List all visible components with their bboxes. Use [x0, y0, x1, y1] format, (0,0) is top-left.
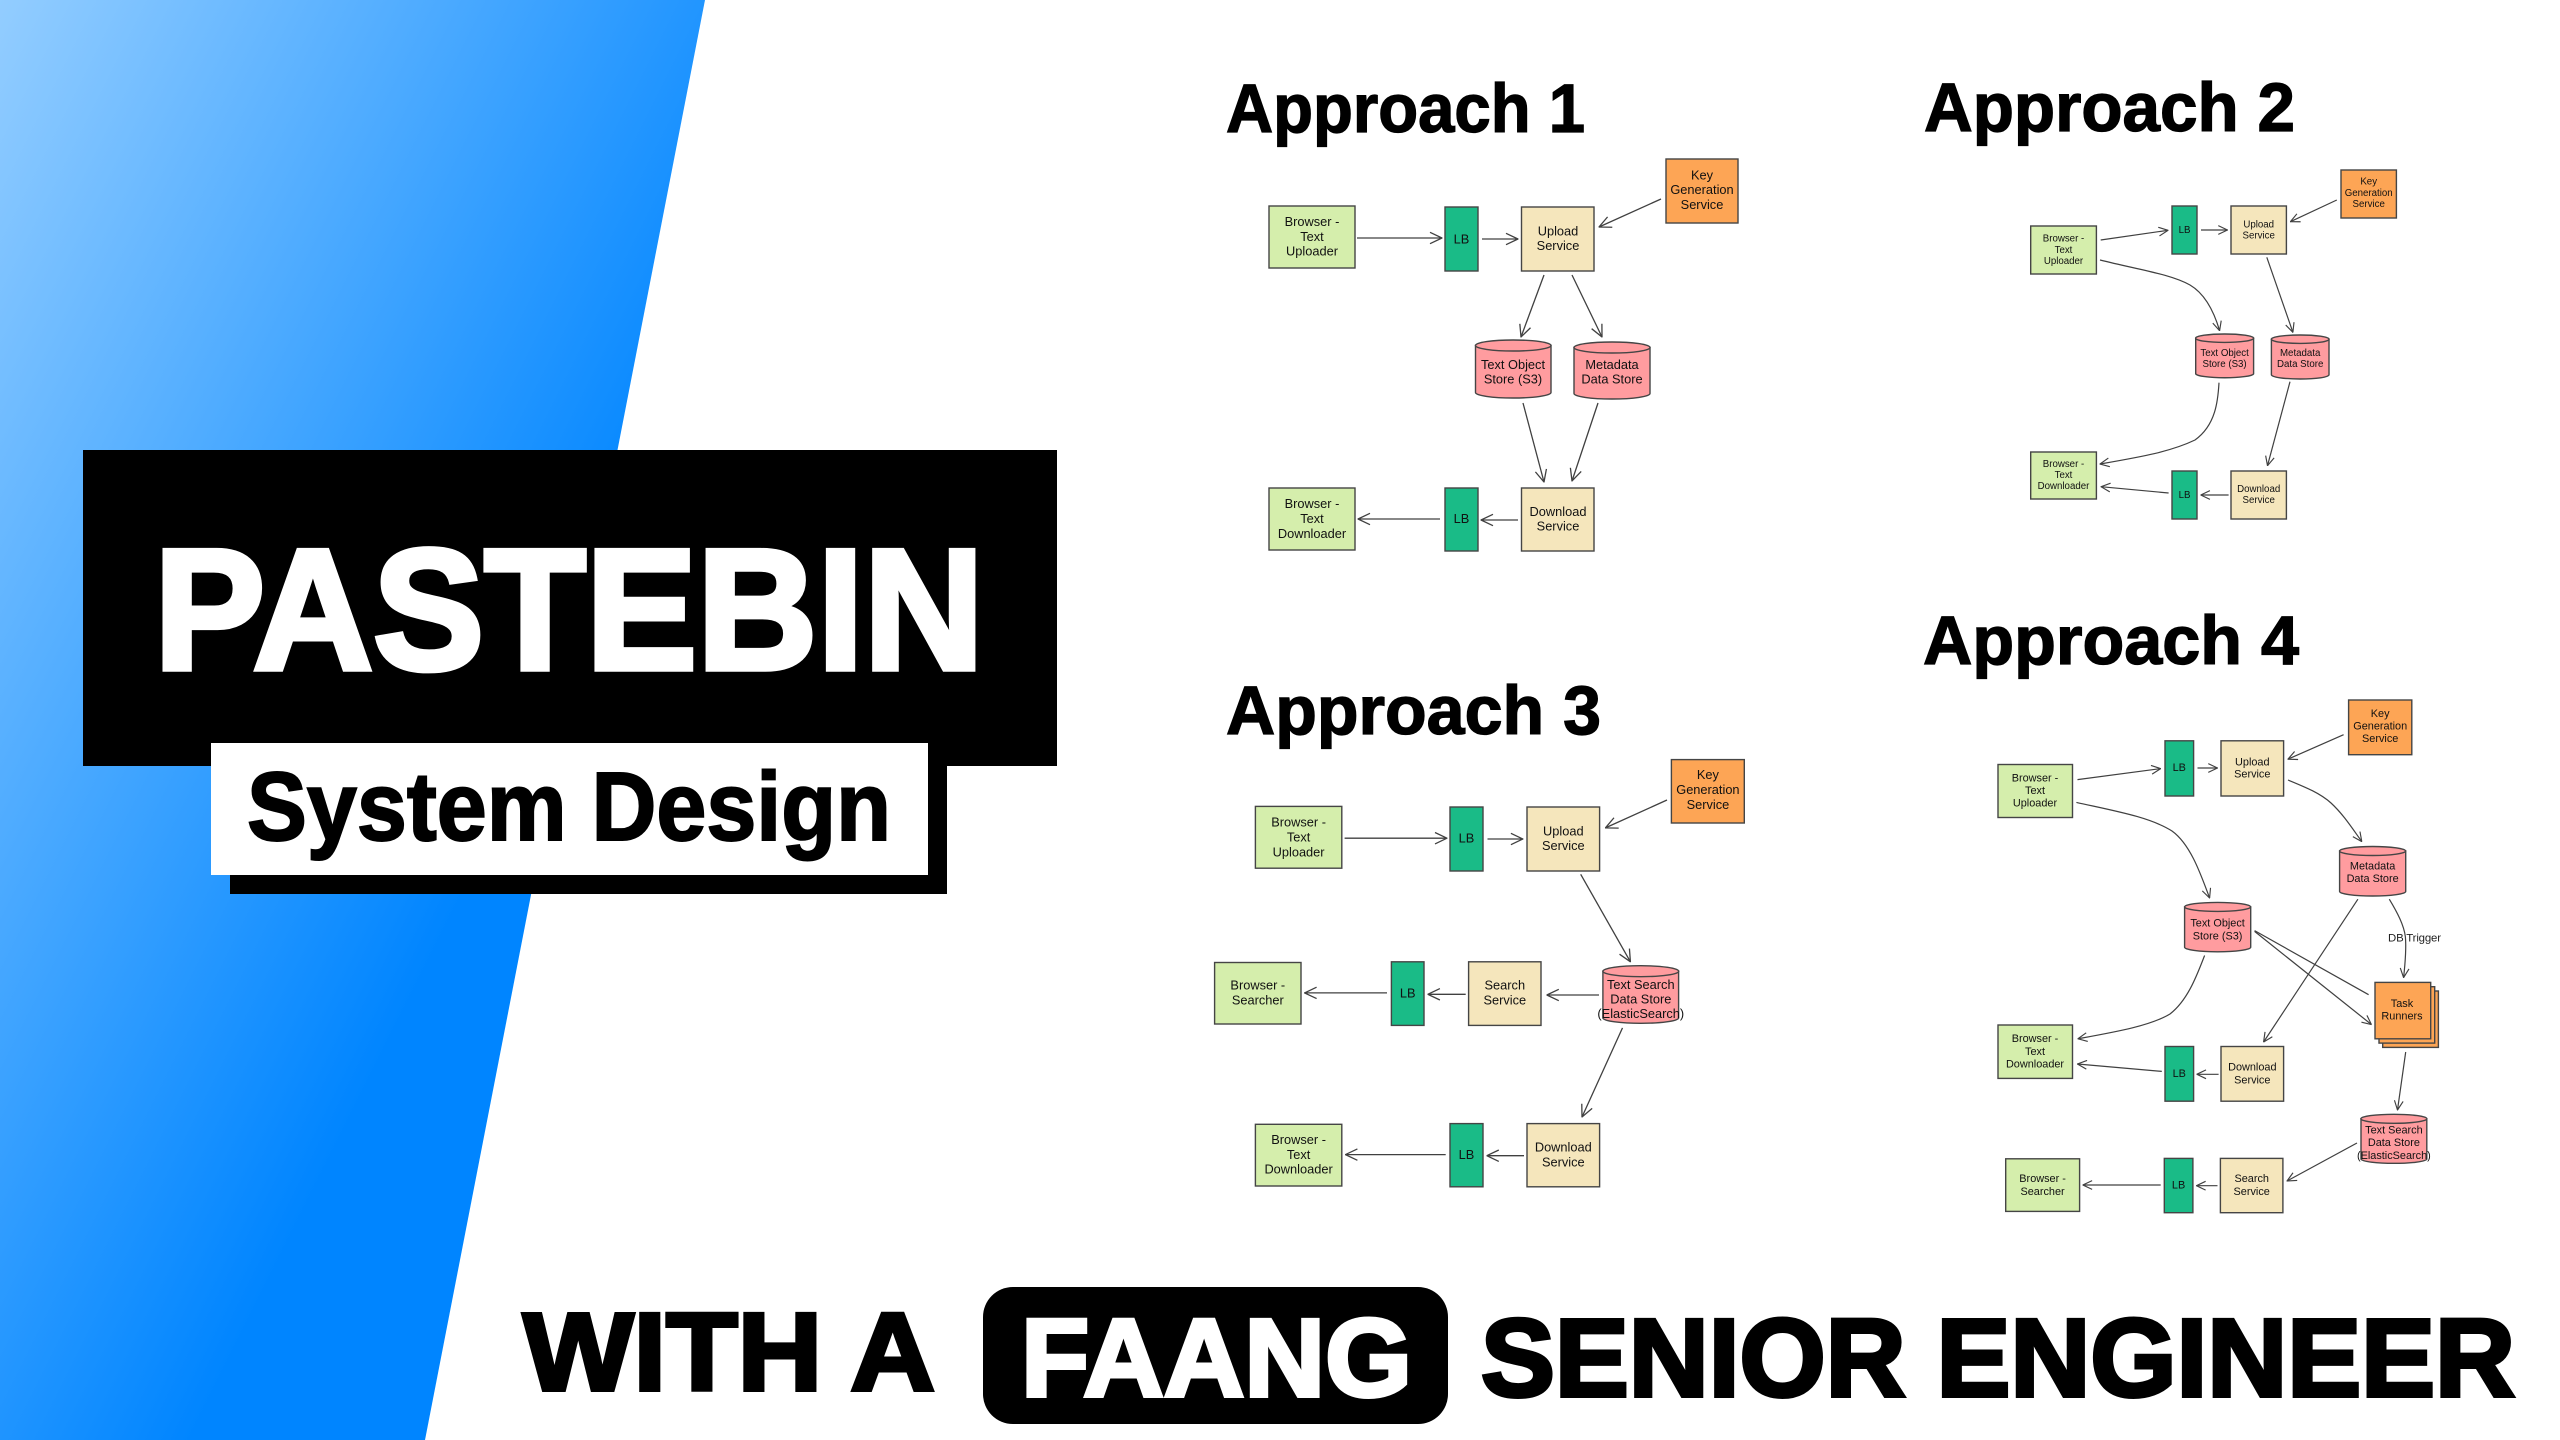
node: Browser - Text Uploader	[1269, 206, 1355, 268]
node: LB upper	[2172, 206, 2197, 254]
node: Browser - Text Uploader: Uploader	[2044, 256, 2084, 267]
node: Text Search Data Store (ElasticSearch): (ElasticSearch)	[1597, 1006, 1684, 1021]
node: Browser - Text Uploader: Text	[1300, 229, 1324, 244]
node: Metadata Data Store: Data Store	[1581, 372, 1643, 386]
node: Browser - Text Downloader: Downloader	[2038, 481, 2090, 492]
node: LB lower	[2172, 471, 2197, 519]
tagline: WITH A FAANG SENIOR ENGINEER	[523, 1287, 2515, 1424]
node: Text Object Store (S3): Store (S3)	[2203, 359, 2247, 370]
node: Metadata Data Store	[2340, 846, 2406, 896]
node: Text Object Store (S3): Store (S3)	[2193, 930, 2242, 942]
node: Metadata Data Store: Data Store	[2347, 873, 2399, 885]
node: LB middle	[2165, 1046, 2194, 1101]
node: Browser - Text Downloader: Browser -	[2012, 1033, 2059, 1045]
panel: Approach 1	[1226, 70, 1738, 551]
node: Browser - Text Downloader: Text	[2025, 1046, 2045, 1058]
node: Browser - Text Uploader	[1998, 764, 2072, 818]
node: Search Service	[2220, 1158, 2283, 1213]
heading: Approach 3: Approach 3	[1226, 672, 1601, 749]
heading: Approach 4: Approach 4	[1923, 602, 2299, 679]
node: Download Service	[1527, 1124, 1600, 1187]
arrows: approach 3	[1305, 800, 1667, 1156]
node: Browser - Text Downloader	[2031, 452, 2096, 499]
node: Browser - Text Downloader: Browser -	[1271, 1132, 1326, 1147]
node: Browser - Text Downloader: Text	[2055, 470, 2073, 481]
node: Upload Service	[2231, 206, 2286, 254]
node: Upload Service: Service	[2234, 769, 2270, 781]
title panel: black box	[83, 450, 1057, 766]
node: Metadata Data Store	[2271, 335, 2329, 379]
node: Browser - Text Uploader: Browser -	[1271, 814, 1326, 829]
panel: Approach 3	[1215, 672, 1744, 1187]
node: Key Generation Service: Key	[2371, 708, 2390, 720]
node: Upload Service: Service	[2243, 230, 2275, 242]
arrows: approach 4	[2076, 735, 2406, 1186]
node: Key Generation Service: Generation	[1676, 782, 1740, 797]
title block: PASTEBIN System Design	[83, 450, 1057, 894]
node: Text Object Store (S3)	[1476, 340, 1551, 398]
node: LB middle: LB	[2173, 1068, 2186, 1080]
node: Browser - Text Downloader	[1255, 1124, 1342, 1186]
label: DB Trigger: DB Trigger	[2388, 932, 2441, 944]
node: Download Service: Download	[2237, 484, 2280, 495]
node: Metadata Data Store: Metadata	[2350, 860, 2396, 872]
node: Text Object Store (S3): Text Object	[2200, 348, 2249, 359]
node: Search Service	[1469, 962, 1541, 1025]
node: Search Service: Service	[1483, 992, 1526, 1008]
node: Browser - Searcher: Searcher	[1232, 992, 1284, 1008]
node: LB lower: LB	[2172, 1179, 2185, 1191]
node: Browser - Text Downloader: Downloader	[1278, 526, 1347, 541]
node: Text Search Data Store (ElasticSearch): Data Store	[2368, 1137, 2420, 1149]
node: Browser - Searcher	[2006, 1159, 2080, 1211]
node: LB upper	[2165, 741, 2194, 796]
panel: Approach 4	[1923, 602, 2441, 1213]
node: LB lower: LB	[1459, 1147, 1474, 1162]
node: Key Generation Service: Generation	[2353, 720, 2407, 732]
node: Search Service: Search	[1485, 978, 1525, 992]
node: Task Runners stack: Runners	[2381, 1011, 2423, 1023]
node: Upload Service: Upload	[2243, 220, 2274, 230]
node: LB upper: LB	[2179, 225, 2190, 236]
node: LB upper	[1445, 207, 1478, 271]
node: Download Service	[1522, 488, 1594, 551]
node: LB lower: LB	[2179, 490, 2190, 501]
node: Key Generation Service	[1671, 760, 1744, 823]
node: Browser - Text Downloader: Downloader	[2006, 1058, 2064, 1070]
FAANG pill	[983, 1287, 1448, 1424]
node: Browser - Text Uploader: Text	[2055, 245, 2073, 256]
node: Browser - Text Uploader: Uploader	[1286, 244, 1339, 258]
node: LB lower: LB	[1454, 511, 1469, 526]
node: Download Service: Download	[1530, 504, 1586, 519]
node: Download Service	[2231, 471, 2286, 519]
node: Browser - Text Downloader: Browser -	[1285, 496, 1339, 511]
node: Text Object Store (S3)	[2185, 902, 2251, 952]
node: Download Service: Service	[1537, 518, 1579, 534]
node: Browser - Text Uploader	[1255, 806, 1342, 868]
node: Text Search Data Store (ElasticSearch)	[1597, 966, 1684, 1023]
node: Key Generation Service: Service	[2362, 733, 2398, 745]
node: Text Search Data Store (ElasticSearch): Text Search	[2365, 1125, 2423, 1137]
node: Upload Service: Service	[1542, 838, 1585, 853]
node: Key Generation Service: Service	[1687, 797, 1729, 812]
node: Text Search Data Store (ElasticSearch): Text Search	[1607, 977, 1675, 992]
node: Browser - Text Downloader: Text	[1287, 1147, 1311, 1162]
node: Key Generation Service: Key	[1697, 767, 1720, 782]
node: Browser - Text Uploader: Text	[1287, 829, 1311, 844]
node: Key Generation Service	[1666, 159, 1738, 223]
node: Browser - Text Downloader: Browser -	[2043, 459, 2084, 470]
node: Download Service: Service	[2234, 1074, 2270, 1086]
node: Upload Service	[2221, 741, 2284, 796]
node: Key Generation Service: Service	[2353, 199, 2385, 210]
tagline text: WITH A: WITH A	[523, 1291, 935, 1414]
node: LB upper	[1450, 807, 1483, 871]
node: Upload Service: Upload	[1543, 824, 1584, 838]
node: Browser - Text Uploader: Browser -	[2012, 772, 2059, 784]
arrows: approach 2	[2100, 200, 2337, 495]
node: Browser - Text Uploader	[2031, 226, 2096, 274]
node: Browser - Searcher	[1215, 962, 1301, 1024]
node: Key Generation Service	[2349, 700, 2412, 755]
subtitle panel: white box	[211, 743, 928, 875]
node: Task Runners stack: Task	[2391, 998, 2414, 1010]
node: Browser - Searcher: Browser -	[2019, 1173, 2066, 1185]
node: Browser - Text Downloader: Text	[1300, 511, 1324, 526]
arrows: approach 1	[1357, 199, 1661, 520]
node: Text Object Store (S3)	[2196, 334, 2254, 378]
node: Key Generation Service: Generation	[1670, 182, 1734, 197]
node: Task Runners stack	[2375, 982, 2438, 1047]
node: LB upper: LB	[1459, 831, 1474, 846]
node: Search Service: Service	[2234, 1186, 2270, 1198]
node: Browser - Text Uploader: Browser -	[2043, 234, 2084, 245]
title: PASTEBIN: PASTEBIN	[154, 514, 984, 706]
node: LB lower	[2164, 1158, 2193, 1213]
node: Text Search Data Store (ElasticSearch): Data Store	[1610, 992, 1671, 1006]
heading: Approach 1: Approach 1	[1226, 70, 1585, 147]
node: Upload Service: Upload	[2235, 756, 2270, 768]
node: Download Service	[2221, 1046, 2284, 1101]
node: Text Search Data Store (ElasticSearch): (ElasticSearch)	[2357, 1150, 2431, 1162]
node: Metadata Data Store: Metadata	[1585, 357, 1640, 372]
node: Text Search Data Store (ElasticSearch)	[2357, 1114, 2431, 1163]
node: Metadata Data Store: Data Store	[2277, 359, 2323, 370]
node: Metadata Data Store: Metadata	[2280, 348, 2321, 359]
node: LB upper: LB	[2173, 762, 2186, 774]
node: Text Object Store (S3): Text Object	[2190, 918, 2245, 930]
node: Browser - Text Uploader: Text	[2025, 785, 2045, 797]
tagline text: SENIOR ENGINEER: SENIOR ENGINEER	[1481, 1297, 2515, 1420]
node: Download Service: Download	[2228, 1062, 2277, 1074]
node: LB lower	[1445, 488, 1478, 551]
node: Browser - Text Downloader	[1269, 488, 1355, 550]
node: LB middle	[1391, 962, 1424, 1025]
node: Download Service: Service	[2243, 495, 2275, 506]
node: Browser - Text Downloader: Downloader	[1264, 1162, 1333, 1176]
node: Upload Service: Service	[1537, 238, 1579, 253]
node: Browser - Searcher: Browser -	[1230, 978, 1285, 992]
subtitle shadow	[230, 760, 947, 894]
node: LB lower	[1450, 1124, 1483, 1187]
tagline text: FAANG: FAANG	[1021, 1297, 1412, 1420]
blue gradient background slant	[0, 0, 705, 1440]
node: Upload Service	[1527, 807, 1600, 871]
node: Browser - Text Downloader	[1998, 1025, 2072, 1078]
node: Key Generation Service	[2341, 170, 2396, 218]
node: LB upper: LB	[1454, 232, 1469, 246]
node: LB middle: LB	[1400, 985, 1416, 1000]
node: Browser - Text Uploader: Uploader	[2013, 798, 2057, 810]
node: Upload Service	[1522, 207, 1594, 271]
node: Search Service: Search	[2234, 1173, 2269, 1185]
node: Browser - Text Uploader: Browser -	[1285, 214, 1339, 229]
node: Upload Service: Upload	[1538, 224, 1578, 238]
heading: Approach 2: Approach 2	[1924, 69, 2295, 146]
node: Key Generation Service: Service	[1681, 197, 1723, 212]
node: Download Service: Download	[1535, 1140, 1592, 1155]
node: Key Generation Service: Key	[1691, 168, 1714, 182]
node: Metadata Data Store	[1574, 342, 1650, 399]
node: Key Generation Service: Key	[2360, 176, 2377, 188]
node: Text Object Store (S3): Text Object	[1481, 357, 1545, 372]
subtitle: System Design: System Design	[247, 752, 891, 861]
panel: Approach 2	[1924, 69, 2396, 519]
node: Browser - Searcher: Searcher	[2020, 1186, 2065, 1198]
node: Text Object Store (S3): Store (S3)	[1484, 372, 1542, 386]
node: Download Service: Service	[1542, 1154, 1585, 1169]
node: Browser - Text Uploader: Uploader	[1273, 844, 1325, 859]
node: Key Generation Service: Generation	[2345, 188, 2393, 199]
